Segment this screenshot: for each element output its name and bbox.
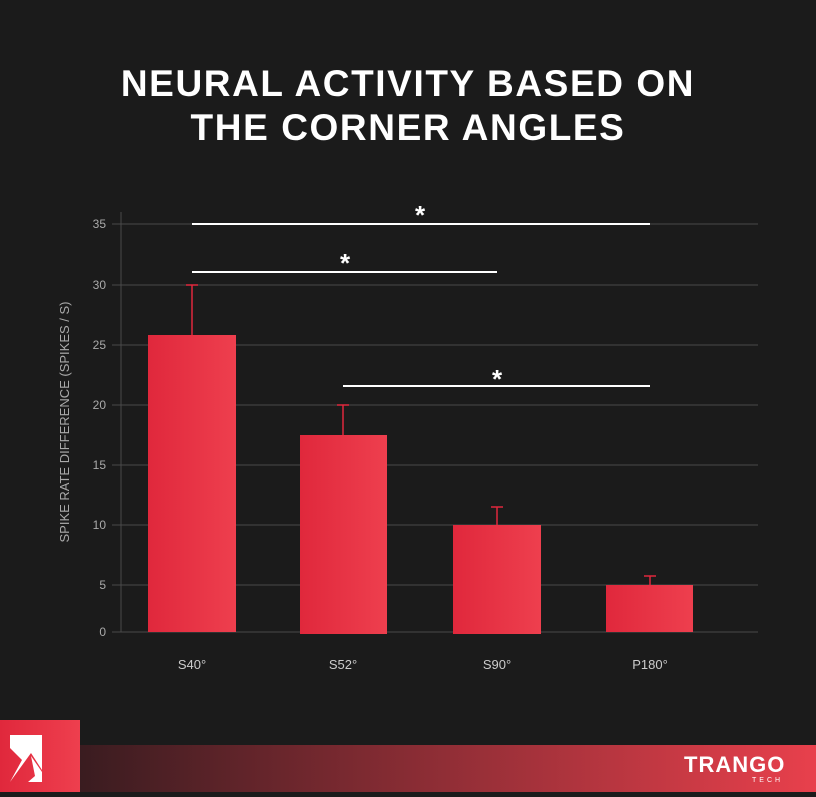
title: NEURAL ACTIVITY BASED ON (121, 63, 695, 104)
text: TECH (752, 777, 783, 784)
y axis ticks: 5 (99, 578, 106, 592)
significance lines (192, 224, 650, 386)
y axis ticks: 20 (93, 398, 106, 412)
y axis ticks: 25 (93, 338, 106, 352)
y axis ticks: 35 (93, 217, 106, 231)
x labels (178, 657, 668, 672)
error bars (186, 285, 656, 585)
bar chart: * (492, 364, 503, 394)
y axis ticks: 10 (93, 518, 106, 532)
y axis ticks: 0 (99, 625, 106, 639)
x labels: P180° (632, 657, 668, 672)
y axis ticks: 30 (93, 278, 106, 292)
y axis label: SPIKE RATE DIFFERENCE (SPIKES / S) (57, 301, 72, 543)
x labels: S40° (178, 657, 206, 672)
bars (148, 335, 693, 634)
y axis ticks (93, 217, 106, 639)
logo square (0, 720, 80, 792)
brand: TRANGO (684, 752, 785, 777)
bar chart: * (415, 200, 426, 230)
x labels: S90° (483, 657, 511, 672)
title: THE CORNER ANGLES (191, 107, 625, 148)
y axis ticks: 15 (93, 458, 106, 472)
footer bar (80, 745, 816, 792)
bar chart: * (340, 248, 351, 278)
x labels: S52° (329, 657, 357, 672)
title (121, 63, 695, 148)
